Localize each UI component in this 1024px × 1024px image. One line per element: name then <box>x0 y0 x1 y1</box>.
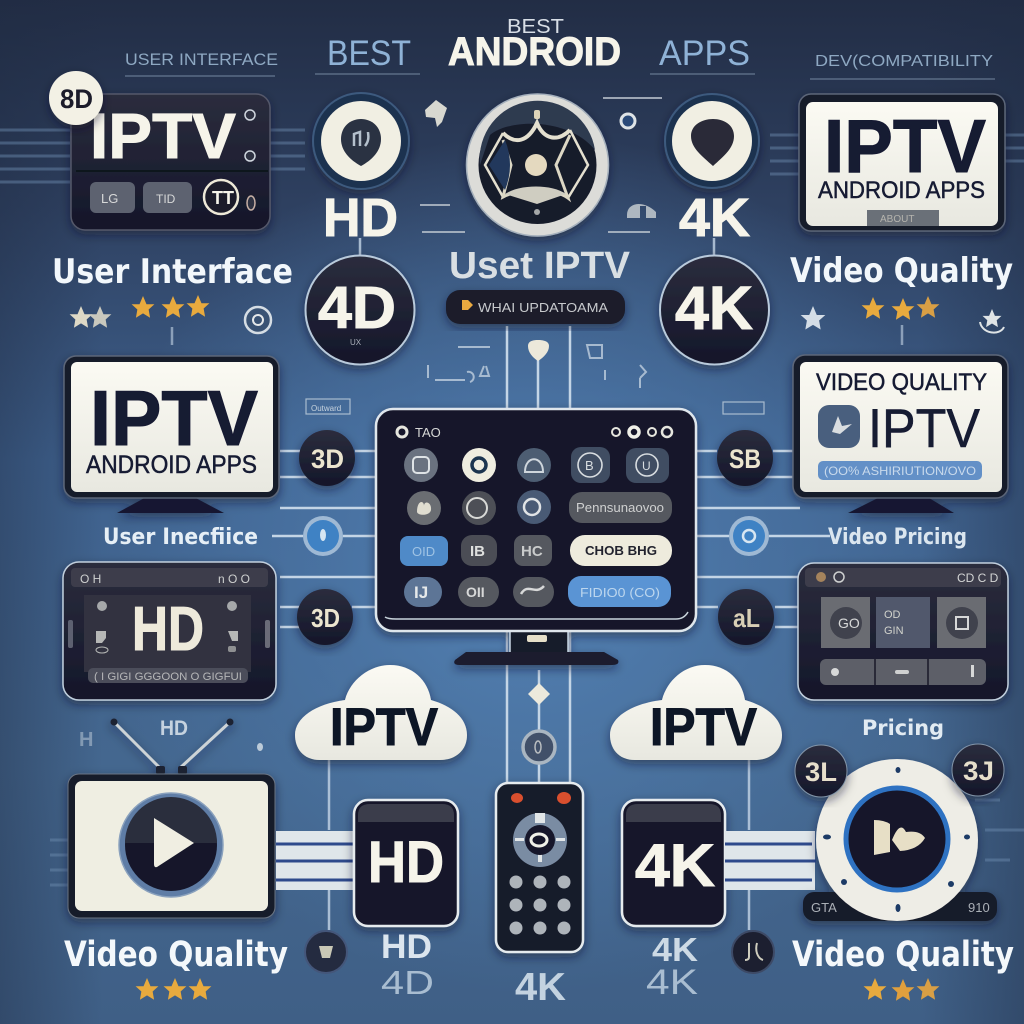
tile 2: GIN <box>884 625 904 637</box>
icon: central app logo <box>466 94 608 236</box>
keypad <box>510 876 570 934</box>
icon: lower left small <box>305 931 347 973</box>
icon: blue circle left <box>303 516 343 556</box>
top bar <box>397 425 672 440</box>
badge: 3D left lower <box>297 589 353 645</box>
icon: blue circle right <box>729 516 769 556</box>
panel: right app tiles: CD C D <box>957 571 999 585</box>
app grid: U <box>642 459 651 473</box>
app grid: OII <box>466 584 485 600</box>
button 2: TID <box>156 192 176 206</box>
tile 1 <box>821 597 870 648</box>
HD text: HD <box>132 595 204 664</box>
badge: SB right <box>717 430 773 486</box>
badge: 3D left <box>299 430 355 486</box>
panel: right video quality monitor <box>793 355 1008 513</box>
badge: dial left <box>795 745 847 797</box>
blue bar <box>818 461 982 480</box>
label: HD under tile: HD <box>381 928 432 966</box>
icon: 4D circle: UX <box>350 338 362 347</box>
small decor icons near logo <box>420 98 662 232</box>
heading: VIDEO QUALITY <box>816 369 987 396</box>
icon: 4K lower circle: 4K <box>675 274 753 342</box>
button 3 <box>204 180 238 214</box>
stars: top-left <box>70 295 209 328</box>
app grid: HC <box>521 543 543 560</box>
dial base pill: 910 <box>968 900 990 915</box>
connector lines <box>172 238 902 930</box>
stripes: left connector <box>276 831 354 890</box>
panel: left IPTV monitor <box>64 356 279 513</box>
dial: video quality <box>803 759 997 921</box>
small outline tag right <box>723 402 764 414</box>
label: user interface: User Interface <box>52 252 293 292</box>
icon: small node <box>523 731 555 763</box>
header label: user interface: USER INTERFACE <box>125 50 278 69</box>
title: small best: BEST <box>507 16 564 38</box>
badge: 8D <box>49 71 103 125</box>
stars: bottom-right <box>864 978 939 1001</box>
tile: 4K <box>622 800 725 926</box>
panel: left HD player: n O O <box>218 572 250 586</box>
icon: 4D circle: 4D <box>318 275 396 341</box>
subtitle: ANDROID APPS <box>86 451 257 479</box>
tile: HD: HD <box>368 830 444 895</box>
app grid: CHOB BHG <box>585 543 657 558</box>
button 3: TT <box>212 188 234 208</box>
button 2 <box>143 182 192 213</box>
button 1: LG <box>101 191 118 206</box>
tile 1: GO <box>838 615 860 631</box>
badge: 8D: 8D <box>60 84 93 114</box>
app grid: IB <box>470 543 485 560</box>
icon tile <box>818 405 860 448</box>
tile: 4K: 4K <box>635 832 715 899</box>
blue bar: (OO% ASHIRIUTION/OVO <box>824 464 976 478</box>
IPTV text: IPTV <box>824 104 986 188</box>
icon: 4K top circle <box>665 94 759 188</box>
pricing label: Pricing <box>862 716 944 740</box>
IPTV text: IPTV <box>90 100 236 172</box>
stars: top-right <box>801 296 939 330</box>
header label: device compatibility: DEV(COMPATIBILITY <box>815 53 993 70</box>
tile 2 <box>876 597 930 648</box>
play button <box>119 793 223 897</box>
IPTV text: IPTV <box>868 397 980 459</box>
panel: left HD player: ( I GIGI GGGOON O GIGFUI <box>94 671 242 683</box>
label: HD: HD <box>323 188 398 248</box>
cloud: left IPTV <box>295 665 467 760</box>
badge: dial right <box>952 744 1004 796</box>
IPTV text: IPTV <box>90 374 258 462</box>
pill: top center: WHAI UPDATOAMA <box>478 300 608 315</box>
label: second 4K: 4K <box>646 963 698 1002</box>
icon: 4D circle <box>306 256 414 364</box>
app grid: OID <box>412 544 435 559</box>
faint marks: H <box>79 729 93 751</box>
icon: star badge <box>980 309 1004 333</box>
icon: lower right small <box>732 931 774 973</box>
shield node above monitor <box>528 340 549 361</box>
title: android: ANDROID <box>448 30 621 74</box>
tile: HD <box>354 800 458 926</box>
stars: bottom-left <box>136 978 211 1000</box>
cloud: right IPTV <box>610 665 782 760</box>
label: video quality left: Video Quality <box>64 935 288 975</box>
red buttons <box>511 792 571 804</box>
badge: aL right <box>718 589 774 645</box>
pill: top center <box>446 290 625 324</box>
badge: aL right: aL <box>733 603 760 633</box>
tile 2: OD <box>884 609 901 621</box>
label: 4K under tile: 4K <box>652 931 698 968</box>
icon: diamond node <box>528 683 550 705</box>
panel: top-left IPTV app <box>71 94 270 230</box>
panel: top-right IPTV android apps: ABOUT <box>880 214 914 225</box>
icon: TV with play <box>68 718 275 918</box>
app grid: FIDIO0 (CO) <box>580 585 660 600</box>
app grid: IJ <box>414 583 428 602</box>
top bar: TAO <box>415 425 441 440</box>
title: best: BEST <box>327 34 411 73</box>
icon: 4K lower circle <box>660 256 769 364</box>
title <box>327 16 750 74</box>
monitor stand <box>454 630 618 665</box>
badge: 3D left: 3D <box>311 444 344 474</box>
small outline tag left: Outward <box>311 404 341 413</box>
dial base pill: GTA <box>811 900 837 915</box>
tile 3 <box>937 597 986 648</box>
panel: top-right IPTV android apps <box>799 94 1005 231</box>
label: small HD: HD <box>160 717 188 740</box>
panel: right app tiles <box>798 563 1008 700</box>
cloud: right IPTV: IPTV <box>650 698 757 757</box>
label: 4K under remote: 4K <box>515 966 566 1009</box>
subtitle: ANDROID APPS <box>818 177 985 204</box>
small outline tag left <box>306 399 350 414</box>
label: 4K: 4K <box>679 188 750 248</box>
panel: left HD player <box>63 562 276 700</box>
badge: 3D left lower: 3D <box>311 603 340 633</box>
label: Uset IPTV: Uset IPTV <box>449 245 631 287</box>
panel: center monitor <box>376 409 696 665</box>
icon: HD circle <box>313 93 409 189</box>
panel: left HD player: O H <box>80 572 101 586</box>
label: user interface left: User Inecfiice <box>103 525 258 550</box>
cloud: left IPTV: IPTV <box>330 698 438 757</box>
icon: small top-left <box>245 307 271 333</box>
d-pad <box>513 813 567 867</box>
app grid: Pennsunaovoo <box>576 500 664 515</box>
faint marks <box>79 729 263 751</box>
stripes: right connector <box>725 831 816 890</box>
title: apps: APPS <box>659 34 750 73</box>
dial base pill <box>803 892 997 921</box>
app grid <box>400 447 672 607</box>
icon: remote control <box>496 783 583 952</box>
small faint marks above monitor <box>428 345 646 388</box>
label: video pricing: Video Pricing <box>828 525 967 550</box>
badge: dial left: 3L <box>805 757 837 787</box>
badge: dial right: 3J <box>963 756 994 786</box>
app grid: B <box>585 458 594 473</box>
antennas <box>110 718 234 774</box>
label: 4D: 4D <box>381 964 434 1001</box>
button 1 <box>90 182 135 213</box>
badge: SB right: SB <box>729 444 761 474</box>
